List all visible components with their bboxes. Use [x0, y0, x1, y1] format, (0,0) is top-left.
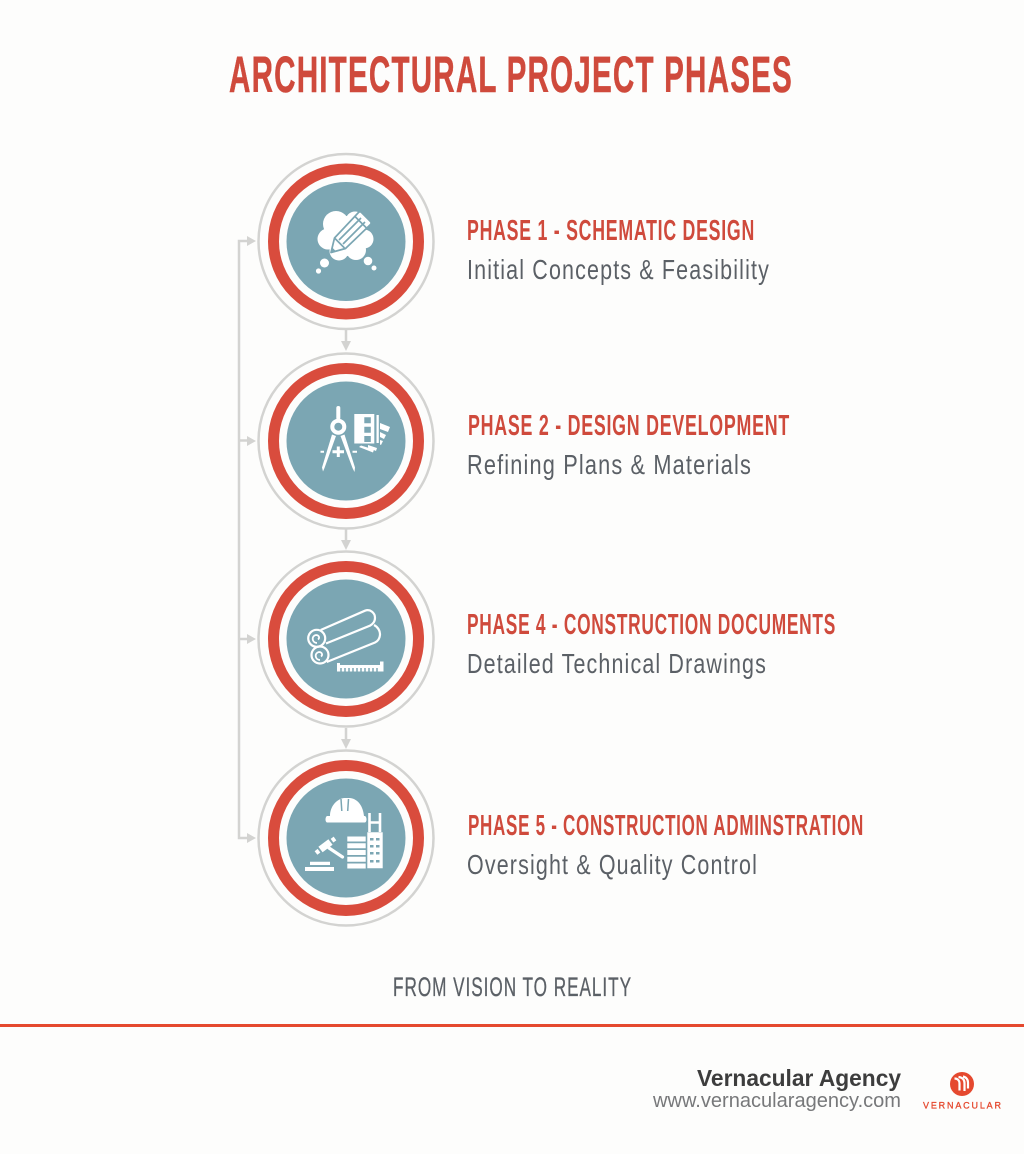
arrow: phase 2 to phase 4 — [341, 529, 351, 550]
icon: hard hat, gavel and building — [305, 798, 383, 871]
icon: thought cloud with pencil — [316, 211, 376, 274]
phase 1 circle badge — [258, 154, 434, 329]
footer website: www.vernacularagency.com — [652, 1090, 901, 1112]
feedback connector: left rail with arrows — [239, 236, 256, 843]
phase 1 heading: PHASE 1 - SCHEMATIC DESIGN — [467, 215, 755, 247]
panel: phase 5 — [258, 750, 864, 926]
logo: Vernacular: VERNACULAR — [923, 1100, 1002, 1110]
panel: phase 1 — [258, 154, 770, 329]
logo: Vernacular — [923, 1072, 1002, 1110]
icon: compass and material swatches — [320, 408, 390, 472]
phase 4 description: Detailed Technical Drawings — [467, 648, 767, 679]
footer divider line — [0, 1024, 1024, 1027]
phase 2 heading: PHASE 2 - DESIGN DEVELOPMENT — [468, 410, 790, 442]
phase 4 circle badge — [258, 552, 434, 726]
arrow: phase 1 to phase 2 — [341, 330, 351, 351]
phase 2 circle badge — [258, 354, 434, 528]
arrow: phase 4 to phase 5 — [341, 728, 351, 749]
tagline: FROM VISION TO REALITY — [393, 972, 632, 1002]
footer agency name: Vernacular Agency — [697, 1065, 901, 1091]
phase 5 description: Oversight & Quality Control — [467, 849, 758, 880]
phase 2 description: Refining Plans & Materials — [467, 449, 752, 480]
panel: phase 4 — [258, 552, 836, 726]
phase 1 description: Initial Concepts & Feasibility — [467, 254, 770, 285]
icon: rolled drawings and ruler — [308, 610, 384, 672]
panel: phase 2 — [258, 354, 790, 528]
phase 5 circle badge — [258, 750, 434, 926]
